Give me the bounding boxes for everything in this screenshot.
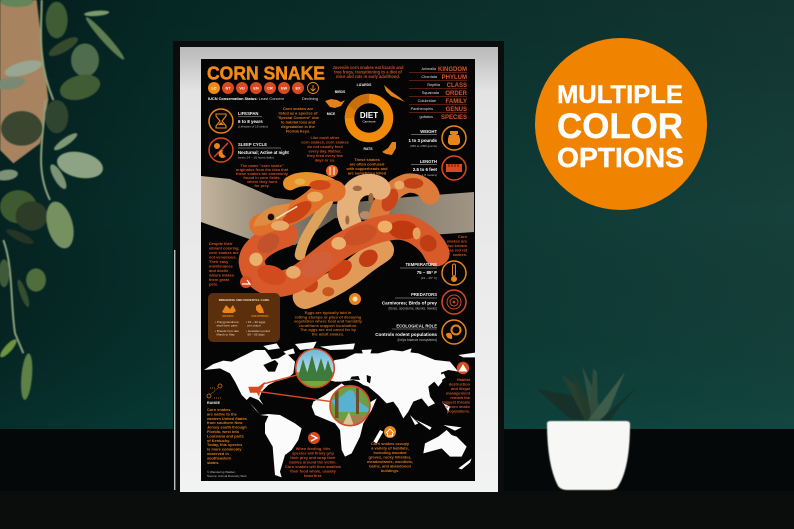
eurasia: [323, 350, 458, 418]
text: range: Florida, west into: [207, 429, 240, 434]
text: threats: management: [446, 390, 471, 396]
taxonomy table: Squamata: [422, 91, 440, 95]
text: threats: [442, 377, 471, 414]
stat: length: (.75 – 1.8 meters): [413, 173, 437, 177]
mating column: • Polygynandrous;: [215, 320, 239, 324]
title: CORN SNAKE: [207, 64, 325, 84]
text: red rat snakes: snakes.: [453, 252, 467, 257]
stat: length: [411, 156, 466, 180]
icon: rat: [382, 142, 396, 155]
mating column: [215, 314, 239, 336]
text: feeding frequency: Like most other: [311, 135, 340, 140]
text: range: Corn snakes: [207, 407, 230, 412]
stat: length: LENGTH: [420, 159, 437, 164]
badge: multiple color options: COLOR: [557, 107, 683, 146]
text: range: states.: [207, 460, 219, 465]
habitat circle: forest: [295, 349, 335, 390]
text: special concern: [277, 106, 320, 134]
text: special concern: listed as a species of: [279, 110, 318, 116]
text: red rat snakes: Corn: [458, 234, 468, 239]
text: feeding: [285, 446, 342, 478]
diet labels: BIRDS: [335, 90, 346, 94]
snake: cream coil: [347, 185, 380, 225]
IUCN status line: IUCN Conservation Status: Least Concern: [208, 96, 284, 101]
text: range: Jersey south through: [207, 425, 247, 430]
credit: © Wandering Walden: [207, 470, 236, 474]
plant: hanging vine with basket: [0, 0, 127, 400]
text: range: observed in: [207, 451, 229, 456]
pot with succulent: [537, 366, 638, 490]
taxonomy table: Pantherophis: [411, 107, 433, 111]
text: venomous: Their easy: [209, 259, 229, 264]
text: eggs: Eggs are typically laid in: [305, 310, 352, 315]
text: special concern: Corn snakes are: [283, 106, 314, 111]
stat: temperature: [400, 261, 466, 285]
text: range: of Kentucky.: [207, 438, 230, 443]
photo: corn snake on branch: [201, 176, 474, 297]
text: range: Louisiana and parts: [207, 433, 244, 438]
text: red rat snakes: [446, 234, 468, 257]
text: red rat snakes: also known: [446, 243, 468, 248]
text: venomous: maintenance: [209, 264, 234, 268]
stat: lifespan: [209, 109, 268, 133]
text: range: [207, 407, 247, 465]
text: special concern: degradation in the: [281, 124, 316, 129]
text: threats: remain the: [450, 395, 471, 400]
icon: egg badge: [349, 293, 361, 305]
text: range: southeastern: [207, 455, 232, 460]
mating column: March to May: [216, 332, 235, 336]
icon: bird: [325, 99, 345, 108]
text: venomous: nature makes: [209, 272, 234, 278]
text: feeding: head first.: [304, 473, 322, 478]
taxonomy table: CLASS: [447, 83, 467, 89]
stat: length: 2.5 to 6 feet: [413, 167, 438, 172]
icon: warning badge: [457, 362, 469, 374]
stat: lifespan: (Lifespan of 15 years): [238, 124, 268, 128]
stat: weight: WEIGHT: [420, 129, 437, 134]
range highlight and connector lines: [248, 375, 332, 402]
text: habitats: buildings.: [381, 468, 399, 473]
diet labels: [327, 83, 373, 151]
americas: [204, 342, 317, 477]
conservation status badges: VU: [239, 86, 245, 90]
stat: weight: [408, 126, 466, 150]
world map: [204, 342, 475, 477]
intro text: Juvenile corn snakes eat lizards and: [332, 65, 404, 70]
text: feeding: their food whole, usually: [290, 468, 337, 474]
stat: lifespan: LIFESPAN: [238, 111, 258, 116]
snake: neck descending: [300, 197, 330, 255]
panel: breeding and parental care: [208, 293, 280, 342]
stat: sleep cycle: Nocturnal; Active at night: [238, 150, 289, 155]
text: feeding: bodies around the victim.: [289, 460, 337, 464]
text: habitats: meadowlands, woodlots,: [367, 459, 413, 464]
stat: sleep cycle: [209, 138, 289, 162]
taxonomy table: SPECIES: [441, 115, 467, 121]
text: habitats: Corn snakes occupy: [371, 441, 410, 446]
text: copperheads: with copperheads and: [345, 166, 388, 171]
text: range: is more commonly: [207, 447, 242, 452]
intro text: tree frogs, transitioning to a diet of: [334, 69, 403, 74]
stat: weight: (450 to 1350 grams): [410, 144, 437, 148]
text: threats: and illegal: [451, 386, 470, 391]
conservation status badges: LC: [211, 86, 217, 90]
offspring column: 60 – 65 days: [248, 332, 265, 336]
text: eggs: conditions support incubation.: [299, 323, 357, 328]
icon: habitat badge: [384, 426, 396, 438]
stat: temperature: TEMPERATURE: [405, 262, 437, 267]
mating column: short-term pairs: [216, 324, 238, 328]
diet labels: MICE: [327, 112, 336, 116]
old world: [312, 343, 475, 469]
stat: ecological role: [375, 320, 466, 344]
text: feeding: species will firmly grip: [292, 450, 334, 456]
icon: range map: [207, 384, 222, 398]
africa: [312, 383, 377, 457]
snake: head and neck: [290, 179, 337, 190]
badge: multiple color options: [535, 38, 707, 210]
taxonomy table: [409, 67, 468, 121]
badge: multiple color options: MULTIPLE: [557, 81, 683, 109]
badge: multiple color options: OPTIONS: [557, 142, 684, 173]
text: eggs: [294, 310, 363, 336]
text: feeding frequency: corn snakes, corn snakes: [301, 140, 349, 144]
stat: weight: 1 to 3 pounds: [408, 138, 438, 143]
text: copperheads: [345, 157, 388, 180]
text: habitats: [367, 441, 413, 473]
text: red rat snakes: as red rat: [449, 248, 468, 252]
taxonomy table: KINGDOM: [438, 67, 467, 73]
offspring column: per clutch: [248, 324, 261, 328]
text: feeding: their prey and wrap their: [290, 455, 336, 460]
icon: lizard: [384, 85, 405, 102]
offspring column: • 10 – 30 eggs: [246, 320, 266, 324]
text: habitats: groves, rocky hillsides,: [368, 454, 412, 460]
text: name origin: found in corn fields,: [243, 175, 281, 180]
intro text: [332, 65, 404, 79]
diet labels: LIZARDS: [357, 83, 372, 87]
succulent leaves: [537, 366, 638, 420]
taxonomy table: Colubridae: [418, 99, 436, 103]
text: feeding frequency: do not usually feed: [307, 144, 343, 149]
text: name origin: where they hunt: [246, 179, 278, 184]
text: special concern: "Special Concern" due: [277, 115, 320, 120]
text: threats: populations.: [447, 408, 470, 414]
shelf: [0, 429, 794, 529]
text: threats: Habitat: [457, 377, 471, 382]
text: habitats: barns, and abandoned: [369, 464, 411, 468]
text: feeding: When feeding, this: [296, 446, 330, 451]
text: venomous: [209, 241, 239, 286]
credit: [207, 470, 247, 478]
text: habitats: including wooded: [373, 450, 407, 455]
taxonomy table: ORDER: [445, 91, 468, 97]
text: threats: to corn snake: [445, 404, 471, 409]
habitat circle: river: [330, 385, 371, 426]
text: special concern: Florida Keys.: [286, 128, 310, 134]
declining label: Declining: [302, 96, 318, 101]
stat: ecological role: (helps balance ecosystems): [397, 338, 437, 342]
stat: sleep cycle: (rests 14 – 16 hours daily): [238, 156, 274, 160]
text: name origin: The name "corn snake": [240, 163, 284, 168]
taxonomy table: GENUS: [446, 107, 467, 113]
text: feeding frequency: days or so.: [315, 158, 335, 162]
text: copperheads: are often confused: [350, 162, 385, 166]
snake: main front loop: [252, 227, 437, 284]
text: venomous: and docile: [209, 268, 229, 273]
text: range: from southern New: [207, 420, 243, 425]
poster frame: [173, 41, 504, 498]
credit: Source: Animal Diversity Web: [207, 474, 247, 478]
stat: temperature: 75 – 85° F: [417, 270, 437, 275]
taxonomy table: guttatus: [419, 115, 433, 119]
snake: lower coil: [305, 250, 382, 297]
text: name origin: [236, 163, 289, 188]
stat: ecological role: Controls rodent populations: [375, 332, 437, 337]
text: venomous: corn snakes are: [209, 250, 239, 255]
stat: predators: Carnivores; Birds of prey: [382, 300, 437, 306]
range heading: RANGE: [207, 401, 221, 405]
text: copperheads: as a result.: [357, 175, 377, 180]
stat: temperature: (24 – 29° C): [421, 276, 437, 280]
text: range: eastern United States: [207, 416, 247, 421]
mating column: MATING: [222, 314, 234, 318]
taxonomy table: PHYLUM: [442, 75, 467, 81]
taxonomy table: Animalia: [421, 67, 437, 71]
conservation status badges: EN: [253, 86, 259, 90]
text: special concern: to habitat loss and: [281, 120, 316, 124]
panel: breeding and parental care: BREEDING AND PARENTAL CARE: [219, 298, 269, 302]
conservation status badges: [208, 82, 318, 94]
stat: predators: (foxes, opossums, skunks, hawks): [388, 306, 437, 310]
text: habitats: a variety of habitats,: [371, 446, 409, 450]
icon: mating snakes: [222, 305, 236, 313]
text: eggs: The eggs are not cared for by: [300, 327, 357, 332]
diet labels: RATS: [364, 147, 373, 151]
stat: ecological role: ECOLOGICAL ROLE: [396, 324, 437, 328]
icon: offspring eggs: [256, 304, 264, 313]
snake: right upper coil: [377, 183, 430, 222]
icon: fork and knife: [326, 165, 338, 177]
text: name origin: originates from the idea that: [236, 167, 289, 172]
text: eggs: rotting stumps or piles of decaying: [295, 314, 362, 319]
intro text: mice and rats in early adulthood.: [336, 74, 400, 79]
text: feeding: Corn snakes will then swallow: [285, 464, 342, 469]
stat: predators: [382, 290, 466, 314]
poster: [201, 59, 475, 481]
text: name origin: for prey.: [254, 183, 270, 188]
text: range: are native to the: [207, 411, 238, 416]
conservation status badges: EW: [281, 86, 287, 90]
text: copperheads: are sometimes killed: [348, 170, 387, 176]
text: red rat snakes: snakes are: [447, 238, 468, 244]
conservation status badges: EX: [295, 86, 301, 90]
australia: [423, 430, 467, 457]
conservation status badges: CR: [267, 86, 273, 90]
icon: feeding badge: [308, 432, 320, 444]
islands: [315, 343, 475, 469]
text: feeding frequency: every day. Rather,: [308, 148, 342, 154]
branch: [201, 176, 474, 245]
stat: sleep cycle: SLEEP CYCLE: [238, 142, 267, 147]
offspring column: • Gestation period: [246, 329, 270, 333]
mating column: • Breeds from late: [215, 329, 239, 333]
conservation status badges: NT: [225, 86, 231, 90]
diet label: DIET: [360, 111, 378, 120]
text: venomous: pets.: [209, 282, 218, 286]
text: threats: destruction: [449, 382, 471, 386]
text: venomous: them great: [209, 277, 230, 282]
text: range: Today, this species: [207, 442, 242, 447]
offspring column: OFFSPRING: [251, 314, 269, 318]
diet donut chart: [350, 98, 388, 138]
text: copperheads: These snakes: [354, 157, 380, 162]
text: venomous: not venomous.: [209, 254, 237, 260]
diet donut chart: Carnivore: [362, 120, 376, 124]
text: feeding frequency: [301, 135, 349, 162]
offspring column: [246, 314, 270, 336]
taxonomy table: Chordata: [421, 75, 438, 79]
text: threats: biggest threats: [442, 400, 470, 404]
icon: snake badge: [240, 276, 252, 288]
text: venomous: Despite their: [209, 241, 233, 246]
taxonomy table: FAMILY: [446, 99, 467, 105]
text: feeding frequency: they feed every few: [307, 153, 344, 158]
taxonomy table: Reptilia: [427, 83, 441, 87]
text: name origin: these snakes are commonly: [236, 171, 289, 176]
stat: lifespan: 6 to 8 years: [238, 119, 263, 124]
snake: [249, 178, 440, 297]
text: eggs: the adult snakes.: [312, 332, 344, 336]
text: venomous: vibrant coloring,: [209, 246, 239, 250]
stat: predators: PREDATORS: [411, 292, 437, 297]
text: eggs: vegetation where heat and humidity: [294, 319, 363, 324]
